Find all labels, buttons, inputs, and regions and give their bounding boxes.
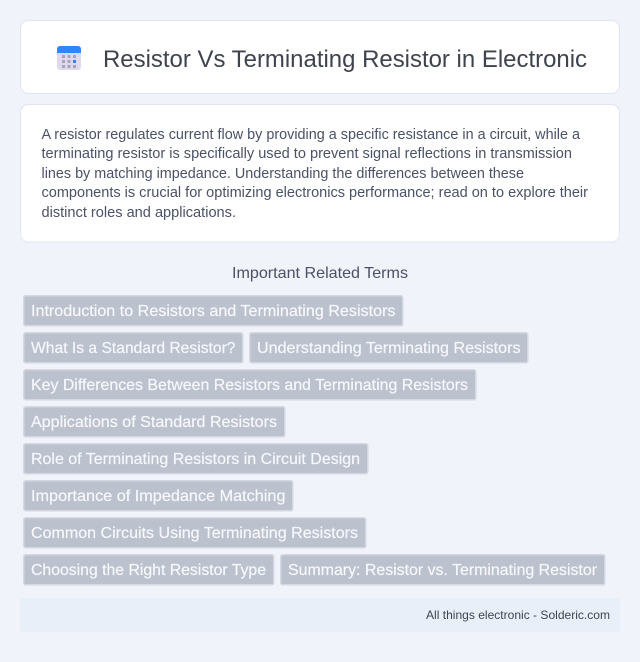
chip: common circuits: Common Circuits Using Terminating Resistors bbox=[31, 525, 358, 542]
chip: choosing type: Choosing the Right Resistor Type bbox=[31, 562, 266, 579]
chip: role in circuit design bbox=[24, 444, 368, 474]
chip: role in circuit design: Role of Terminating Resistors in Circuit Design bbox=[31, 451, 360, 468]
chip: introduction: Introduction to Resistors and Terminating Resistors bbox=[31, 303, 396, 320]
text block: introduction paragraph: lines by matching impedance. Understanding the differences between these bbox=[42, 166, 524, 182]
chip: applications: Applications of Standard Resistors bbox=[31, 414, 277, 431]
chip: understanding terminating resistors bbox=[250, 333, 528, 363]
chip: key differences: Key Differences Between Resistors and Terminating Resistors bbox=[31, 377, 468, 394]
text block: introduction paragraph bbox=[42, 127, 588, 221]
footer: All things electronic - Solderic.com bbox=[426, 608, 610, 622]
panel: title card bbox=[20, 20, 620, 94]
title: Resistor Vs Terminating Resistor in Electronic bbox=[103, 46, 587, 73]
chip: key differences bbox=[24, 370, 476, 400]
chip: summary: Summary: Resistor vs. Terminating Resistor bbox=[288, 562, 598, 579]
chip: applications bbox=[24, 407, 285, 437]
chip: impedance matching bbox=[24, 481, 293, 511]
chip: standard resistor: What Is a Standard Resistor? bbox=[31, 340, 236, 357]
text block: introduction paragraph: components is crucial for optimizing electronics performance; read on to explore their bbox=[42, 185, 588, 201]
chip: understanding terminating resistors: Understanding Terminating Resistors bbox=[257, 340, 520, 357]
text block: introduction paragraph: terminating resistor is specifically used to prevent signal reflections in transmission bbox=[42, 146, 572, 162]
chip: impedance matching: Importance of Impedance Matching bbox=[31, 488, 286, 505]
chip: summary bbox=[281, 555, 605, 585]
chip: standard resistor bbox=[24, 333, 243, 363]
chip: introduction bbox=[24, 296, 403, 326]
text block: introduction paragraph: A resistor regulates current flow by providing a specific resistance in a circuit, while a bbox=[42, 127, 580, 143]
panel: introduction bbox=[20, 104, 620, 242]
chips: related terms bbox=[24, 296, 605, 585]
footer bbox=[20, 598, 620, 632]
chip: choosing type bbox=[24, 555, 274, 585]
chip: common circuits bbox=[24, 518, 366, 548]
text block: introduction paragraph: distinct roles and applications. bbox=[42, 205, 236, 221]
icon: calendar grid bbox=[57, 46, 81, 70]
heading: important related terms: Important Related Terms bbox=[232, 265, 408, 282]
